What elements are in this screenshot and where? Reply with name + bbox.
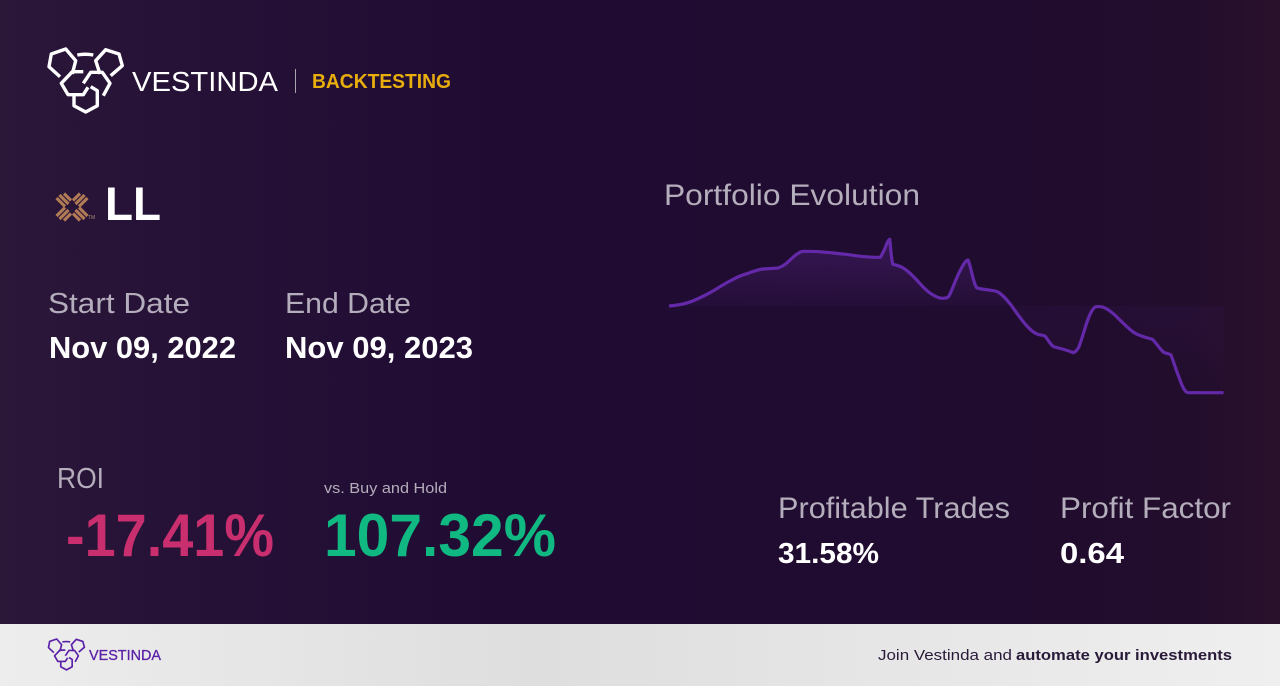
footer call to action: automate your investments [1016, 647, 1232, 664]
profit factor stat: 0.64 [1060, 538, 1124, 570]
vs buy and hold stat: 107.32% [324, 502, 556, 569]
vs buy and hold stat: vs. Buy and Hold [324, 480, 447, 497]
roi stat: -17.41% [66, 502, 274, 569]
trademark: TM [88, 215, 95, 221]
end date: End Date [285, 288, 411, 320]
end date: Nov 09, 2023 [285, 330, 473, 365]
footer call to action: Join Vestinda and [878, 647, 1012, 664]
profitable trades stat: 31.58% [778, 538, 879, 570]
ticker: LL [105, 177, 161, 230]
ticker heading [56, 177, 161, 230]
start date [48, 288, 236, 365]
roi stat [57, 463, 274, 569]
divider [295, 69, 296, 93]
start date: Start Date [48, 288, 190, 320]
chart line [669, 239, 1224, 393]
footer wordmark: VESTINDA [89, 647, 161, 664]
start date: Nov 09, 2022 [49, 330, 236, 365]
icon: Vestinda hexagon logo [49, 49, 122, 112]
profitable trades stat [778, 492, 1010, 570]
header logo and product label [49, 49, 451, 112]
portfolio evolution heading: Portfolio Evolution [664, 179, 920, 212]
line chart: portfolio evolution [669, 239, 1224, 393]
chart area fill [669, 239, 1224, 393]
icon: LL company logo [56, 194, 88, 220]
footer call to action [878, 647, 1232, 664]
profit factor stat [1060, 492, 1231, 570]
profit factor stat: Profit Factor [1060, 492, 1231, 525]
footer bar [0, 624, 1280, 686]
icon: footer Vestinda logo [49, 639, 84, 670]
backtesting label: BACKTESTING [312, 71, 451, 93]
profitable trades stat: Profitable Trades [778, 492, 1010, 525]
wordmark: VESTINDA [132, 66, 278, 97]
end date [285, 288, 473, 365]
roi stat: ROI [57, 463, 104, 495]
